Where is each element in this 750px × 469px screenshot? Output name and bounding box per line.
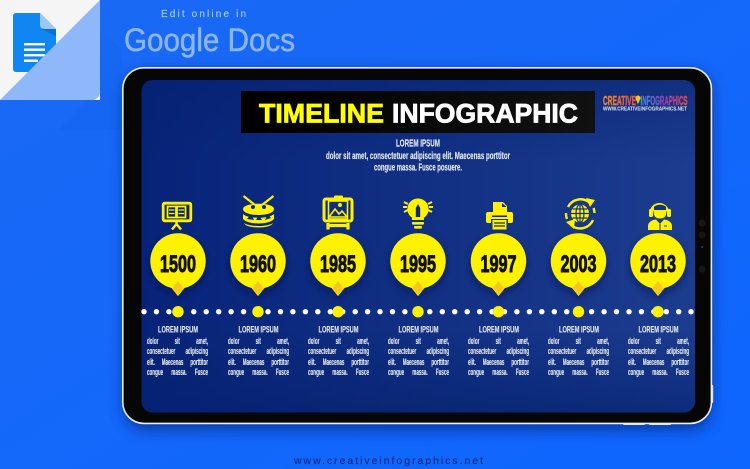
year pin 1500 bbox=[150, 233, 206, 296]
text block: 1500: elit. Maecenas porttitor bbox=[147, 357, 208, 367]
text block: 1960 bbox=[228, 336, 289, 377]
column headings: LOREM IPSUM bbox=[318, 325, 359, 335]
text block: 1500: dolor sit amet, bbox=[147, 336, 208, 346]
intro text block: congue massa. Fusce posuere. bbox=[374, 163, 462, 174]
year pin 1960: 1960 bbox=[240, 251, 276, 278]
timeline markers bbox=[172, 306, 664, 317]
title bar: INFOGRAPHIC bbox=[392, 99, 578, 129]
corner tab: Google Docs badge bbox=[0, 0, 100, 100]
infographic base artwork: INFOGRAPHICS bbox=[640, 93, 688, 108]
logo: Creative Infographics bbox=[603, 93, 688, 112]
intro text block bbox=[326, 138, 510, 174]
text block: 1985: consectetuer adipiscing bbox=[308, 346, 369, 356]
column headings: LOREM IPSUM bbox=[638, 325, 679, 335]
text block: 2013: congue massa. Fusce bbox=[628, 367, 689, 377]
heading: Edit online in: Edit online in bbox=[161, 9, 246, 20]
text block: 1997: elit. Maecenas porttitor bbox=[468, 357, 529, 367]
text block: 2003: dolor sit amet, bbox=[548, 336, 609, 346]
year pin 2003 bbox=[551, 233, 606, 296]
text block: 1995: congue massa. Fusce bbox=[388, 367, 449, 377]
text block: 2013 bbox=[628, 336, 689, 377]
tablet device bbox=[123, 68, 713, 430]
timeline dots bbox=[141, 309, 694, 314]
text block: 1995: elit. Maecenas porttitor bbox=[388, 357, 449, 367]
year pin 2003: 2003 bbox=[560, 251, 596, 278]
text block: 1960: congue massa. Fusce bbox=[228, 367, 289, 377]
intro text block: dolor sit amet, consectetuer adipiscing elit. Maecenas porttitor bbox=[326, 151, 510, 162]
text block: 2003: congue massa. Fusce bbox=[548, 367, 609, 377]
year pin 1997: 1997 bbox=[480, 251, 516, 278]
icon: light bulb with pencil bbox=[403, 198, 433, 229]
text block: 2003: consectetuer adipiscing bbox=[548, 346, 609, 356]
text block: 1997: congue massa. Fusce bbox=[468, 367, 529, 377]
column headings: LOREM IPSUM bbox=[158, 325, 198, 335]
year pin 1500: 1500 bbox=[160, 251, 196, 278]
text block: 1500: consectetuer adipiscing bbox=[147, 346, 208, 356]
column headings: LOREM IPSUM bbox=[238, 325, 279, 335]
text block: 2013: elit. Maecenas porttitor bbox=[628, 357, 689, 367]
column headings: LOREM IPSUM bbox=[398, 325, 439, 335]
title bar: TIMELINE bbox=[259, 99, 384, 129]
text block: 2003: elit. Maecenas porttitor bbox=[548, 357, 609, 367]
text block: 1995: dolor sit amet, bbox=[388, 336, 449, 346]
text block: 1997 bbox=[468, 336, 529, 377]
year pin 1995 bbox=[390, 233, 446, 296]
icon: drum bbox=[243, 196, 274, 228]
text block: 1997: dolor sit amet, bbox=[468, 336, 529, 346]
title bar bbox=[241, 91, 595, 133]
year pin 1960 bbox=[230, 233, 286, 296]
text block: 1997: consectetuer adipiscing bbox=[468, 346, 529, 356]
text block: 1985: dolor sit amet, bbox=[308, 336, 369, 346]
column headings bbox=[158, 325, 679, 335]
icon: globe with arrows bbox=[566, 198, 595, 229]
text block: 1960: consectetuer adipiscing bbox=[228, 346, 289, 356]
logo: Creative Infographics: CREATIVE bbox=[603, 93, 636, 108]
text block: 1995 bbox=[388, 336, 449, 377]
text block: 1985: congue massa. Fusce bbox=[308, 367, 369, 377]
icon: picture on easel bbox=[324, 196, 352, 230]
text block: 1500: congue massa. Fusce bbox=[147, 367, 208, 377]
text block: 1985 bbox=[308, 336, 369, 377]
year pin 1985 bbox=[310, 233, 366, 296]
logo: Creative Infographics: WWW.CREATIVEINFOGRAPHICS.NET bbox=[603, 106, 687, 112]
intro text block: LOREM IPSUM bbox=[396, 138, 440, 150]
text block: 1500 bbox=[147, 336, 208, 377]
icon: printer bbox=[486, 202, 513, 230]
text block: 1995: consectetuer adipiscing bbox=[388, 346, 449, 356]
icon: Google Docs document bbox=[13, 13, 56, 72]
icon: book on easel bbox=[163, 203, 191, 230]
year pin 1997 bbox=[471, 233, 526, 296]
column headings: LOREM IPSUM bbox=[559, 325, 599, 335]
text block: 1960: elit. Maecenas porttitor bbox=[228, 357, 289, 367]
text block: 1985: elit. Maecenas porttitor bbox=[308, 357, 369, 367]
year pin 1995: 1995 bbox=[400, 251, 436, 278]
text block: 2003 bbox=[548, 336, 609, 377]
text block: 1960: dolor sit amet, bbox=[228, 336, 289, 346]
year pin 2013: 2013 bbox=[640, 251, 676, 278]
year pin 1985: 1985 bbox=[320, 251, 356, 278]
text block: 2013: consectetuer adipiscing bbox=[628, 346, 689, 356]
year pin 2013 bbox=[630, 233, 686, 296]
heading: Google Docs wordmark: Google Docs bbox=[124, 22, 295, 58]
tablet screen bbox=[142, 80, 695, 412]
text block: 2013: dolor sit amet, bbox=[628, 336, 689, 346]
column headings: LOREM IPSUM bbox=[479, 325, 519, 335]
icon: person with headset bbox=[648, 203, 672, 230]
website footer: www.creativeinfographics.net bbox=[293, 455, 483, 467]
